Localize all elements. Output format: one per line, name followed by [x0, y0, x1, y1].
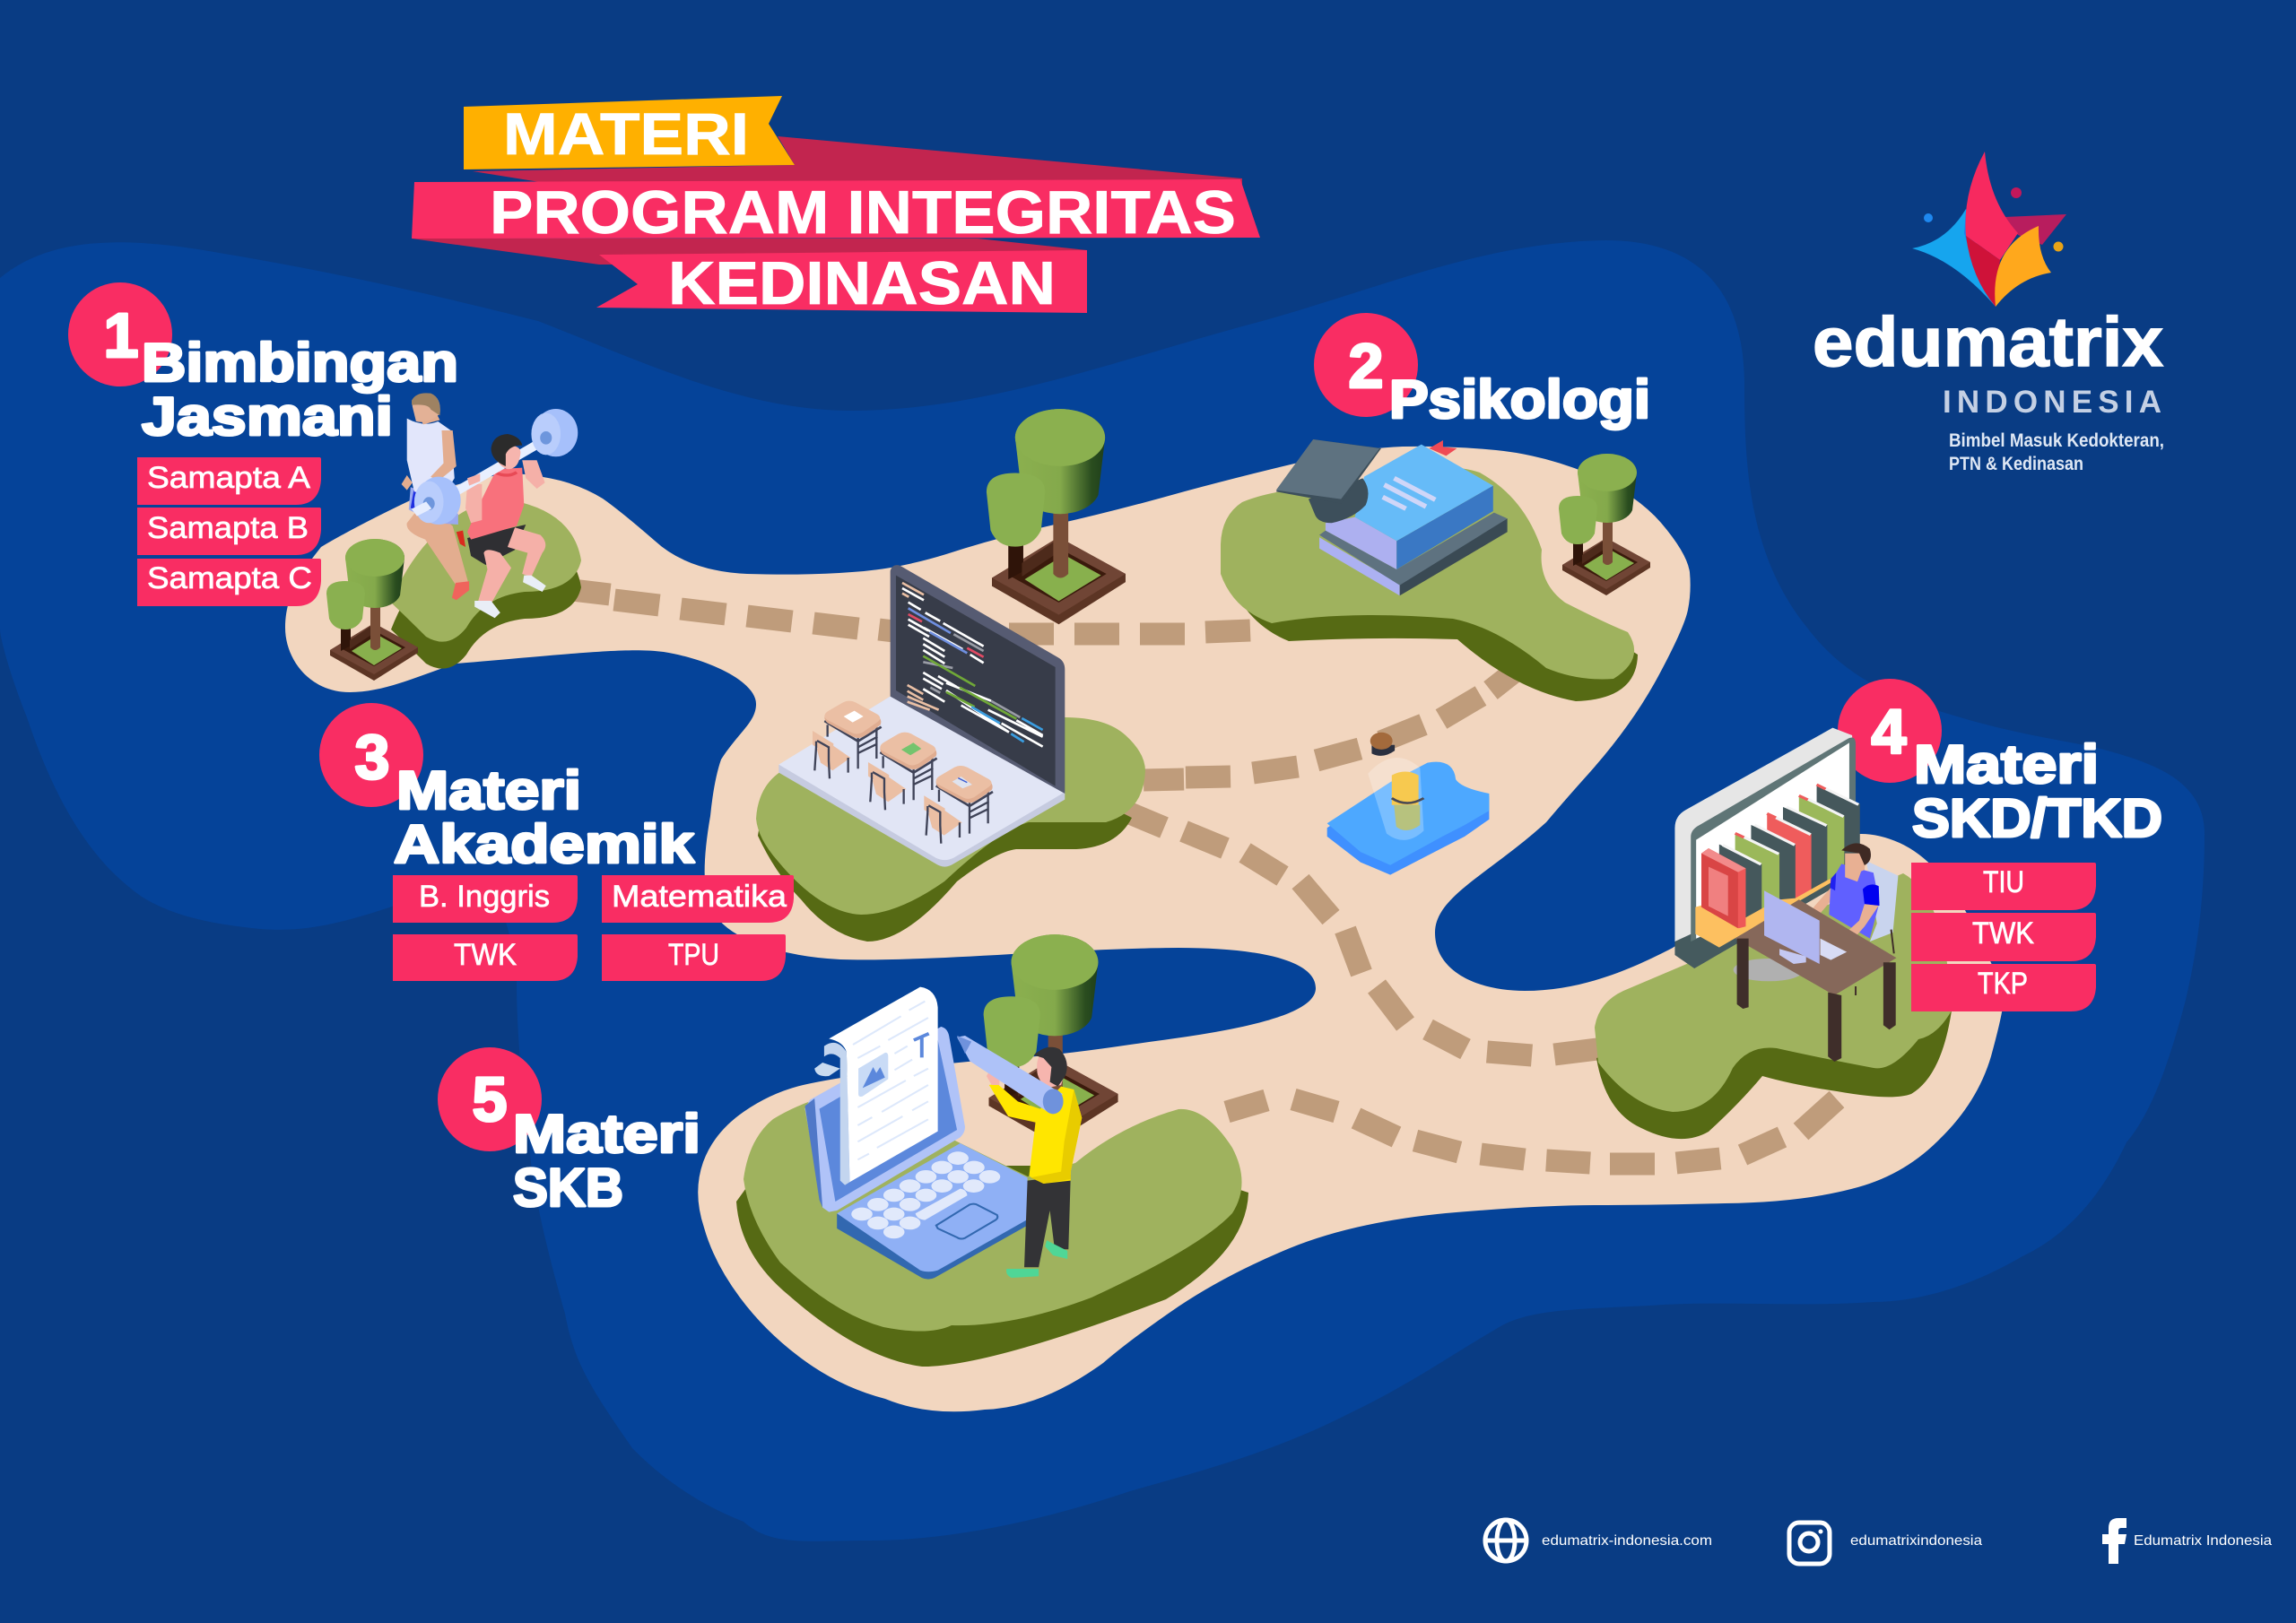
footer: facebook: Edumatrix Indonesia [2134, 1533, 2272, 1549]
brand name: edumatrix [1813, 302, 2163, 381]
heading 3: Akademik [394, 814, 695, 874]
heading 1: Jasmani [142, 386, 393, 447]
label: Matematika [602, 875, 794, 923]
sand island [285, 447, 2004, 1411]
heading: MATERI: MATERI [503, 100, 749, 167]
section 2: psikologi [1314, 313, 1650, 430]
ribbon: pink lower [596, 250, 1087, 313]
illustration: classroom with blackboard [778, 565, 1065, 867]
green island 3 [756, 717, 1145, 942]
heading: PROGRAM INTEGRITAS: PROGRAM INTEGRITAS [490, 178, 1236, 247]
section 1: bimbingan jasmani [68, 282, 458, 606]
label: TKP [1911, 964, 2096, 1011]
label: B. Inggris: B. Inggris [419, 880, 550, 914]
title banner [412, 96, 1260, 313]
green island 2 [1221, 467, 1638, 701]
heading 1: Bimbingan [142, 333, 458, 393]
section 3: materi akademik [319, 703, 794, 981]
heading 5: Materi [513, 1104, 700, 1164]
digit 1: 1 [104, 300, 138, 370]
heading 5 [513, 1104, 700, 1218]
heading: KEDINASAN: KEDINASAN [668, 249, 1056, 317]
footer: website: edumatrix-indonesia.com [1542, 1533, 1712, 1549]
tagline: PTN & Kedinasan [1949, 454, 2083, 474]
footer: facebook [2102, 1518, 2272, 1564]
number badge 1 [68, 282, 172, 386]
label: Samapta B: Samapta B [147, 511, 309, 545]
illustration: books and graduation cap [1276, 439, 1508, 595]
number badge 2 [1314, 313, 1418, 417]
number badge 5 [438, 1047, 542, 1151]
label: TIU: TIU [1983, 865, 2024, 899]
tree behind island 5 [984, 934, 1118, 1142]
label: B. Inggris [393, 875, 578, 923]
label: Samapta A [137, 457, 321, 505]
green island 1 [391, 500, 581, 669]
green island 5 [736, 1089, 1248, 1367]
label: TIU [1911, 863, 2096, 910]
label: Samapta C: Samapta C [147, 561, 312, 595]
illustration: digital library and student [1674, 728, 1898, 1062]
dashed paths [565, 589, 1837, 1164]
section 4: materi skd/tkd [1872, 697, 2162, 1011]
label: TWK [393, 934, 578, 981]
ribbon fold shadows [473, 136, 1242, 190]
label: Samapta A: Samapta A [147, 461, 310, 495]
ribbon: pink main [412, 179, 1260, 239]
label: Matematika: Matematika [612, 880, 787, 914]
ribbon: yellow [464, 96, 795, 169]
tree: psikologi [1559, 454, 1650, 595]
illustration: athletes with barbell [402, 393, 578, 618]
icon: facebook f [2102, 1518, 2126, 1564]
footer: website [1485, 1520, 1712, 1561]
tagline: Bimbel Masuk Kedokteran, [1949, 430, 2164, 451]
tree: centre top [987, 409, 1126, 624]
digit 2: 2 [1349, 331, 1383, 401]
heading 4 [1912, 734, 2162, 848]
icon: instagram [1789, 1523, 1830, 1564]
heading 2: Psikologi [1389, 369, 1650, 430]
heading 4: Materi [1914, 734, 2099, 794]
label: Samapta B [137, 508, 321, 555]
label: TWK: TWK [1972, 916, 2034, 950]
section 5: materi skb [438, 1047, 700, 1218]
number badge 4 [1838, 679, 1942, 783]
heading 3 [394, 760, 695, 874]
label: TKP: TKP [1978, 967, 2028, 1001]
heading 5: SKB [513, 1158, 623, 1218]
number badge 3 [319, 703, 423, 807]
tree: island 1 [326, 539, 418, 681]
heading 4: SKD/TKD [1912, 788, 2162, 848]
background blob [0, 240, 2205, 1541]
label: TWK [1911, 913, 2096, 961]
label: Samapta C [137, 559, 321, 606]
digit 4: 4 [1872, 697, 1907, 767]
digit 3: 3 [355, 722, 389, 792]
footer: instagram: edumatrixindonesia [1850, 1533, 1982, 1549]
books on the shelf [1701, 785, 1860, 928]
brand sub-name: INDONESIA [1943, 385, 2161, 420]
tagline [1949, 430, 2164, 474]
label: TPU: TPU [668, 938, 719, 972]
illustration: scroll in water [1327, 733, 1489, 875]
icon: globe [1485, 1520, 1526, 1561]
label: TWK: TWK [454, 938, 517, 972]
digit 5: 5 [473, 1064, 507, 1134]
green island 4 [1595, 873, 1952, 1139]
logo mark [1912, 152, 2066, 307]
label: TPU [602, 934, 786, 981]
illustration: laptop, document and person with pencil [804, 987, 1082, 1280]
heading 1 [142, 333, 458, 447]
footer: instagram [1789, 1523, 1982, 1564]
heading 3: Materi [396, 760, 581, 820]
